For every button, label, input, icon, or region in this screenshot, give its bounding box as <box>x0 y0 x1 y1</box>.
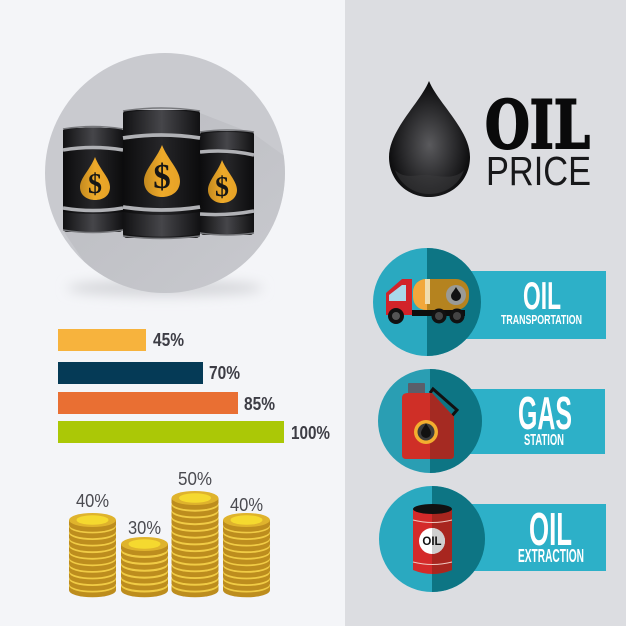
icon: red oil barrel: OIL <box>422 536 442 548</box>
panel: gas station <box>378 369 605 473</box>
center barrel: $ <box>153 157 171 196</box>
banner text: TRANSPORTATION <box>501 312 582 327</box>
stack 30%: 30% <box>128 518 161 538</box>
title: OIL PRICE: OIL <box>485 86 590 164</box>
circle <box>379 486 485 592</box>
banner text: GAS <box>518 387 572 439</box>
banner <box>460 271 606 339</box>
left barrel <box>63 126 123 232</box>
stack 40% right <box>223 495 270 597</box>
banner text: STATION <box>524 432 564 449</box>
long shadow of barrels <box>64 114 240 274</box>
circle <box>378 369 482 473</box>
stack 40% left: 40% <box>76 491 109 511</box>
right barrel <box>200 130 254 235</box>
banner <box>465 389 605 454</box>
banner text <box>518 503 584 566</box>
bar chart: 100% <box>291 423 330 443</box>
panel: oil transportation <box>373 248 606 356</box>
center barrel <box>123 108 200 238</box>
title: OIL PRICE: PRICE <box>486 148 591 194</box>
stack 30% <box>121 518 168 597</box>
icon: fuel can <box>402 383 457 459</box>
grey circle <box>45 53 285 293</box>
stack 50% <box>172 469 218 597</box>
stack 40% left <box>69 491 116 597</box>
banner text <box>501 275 582 327</box>
stack 40% right: 40% <box>230 495 263 515</box>
bar chart: 45% <box>153 330 184 350</box>
stack 50%: 50% <box>178 469 212 489</box>
barrels illustration <box>45 53 290 300</box>
icon: red oil barrel <box>413 504 452 574</box>
bar chart: 85% <box>244 394 275 414</box>
bar chart <box>58 329 330 443</box>
left barrel: $ <box>88 169 102 200</box>
panel: oil extraction <box>379 486 606 592</box>
circle <box>373 248 481 356</box>
banner text: OIL <box>529 503 572 555</box>
banner <box>470 504 606 571</box>
title: oil drop <box>389 81 470 197</box>
title: OIL PRICE <box>485 86 591 194</box>
banner text <box>518 387 572 449</box>
right background panel <box>345 0 626 626</box>
ground shadow <box>67 280 263 296</box>
coin stacks chart <box>69 469 270 597</box>
bar chart: 70% <box>209 363 240 383</box>
right barrel: $ <box>215 172 229 203</box>
icon: tanker truck <box>386 279 469 324</box>
banner text: OIL <box>523 275 561 318</box>
